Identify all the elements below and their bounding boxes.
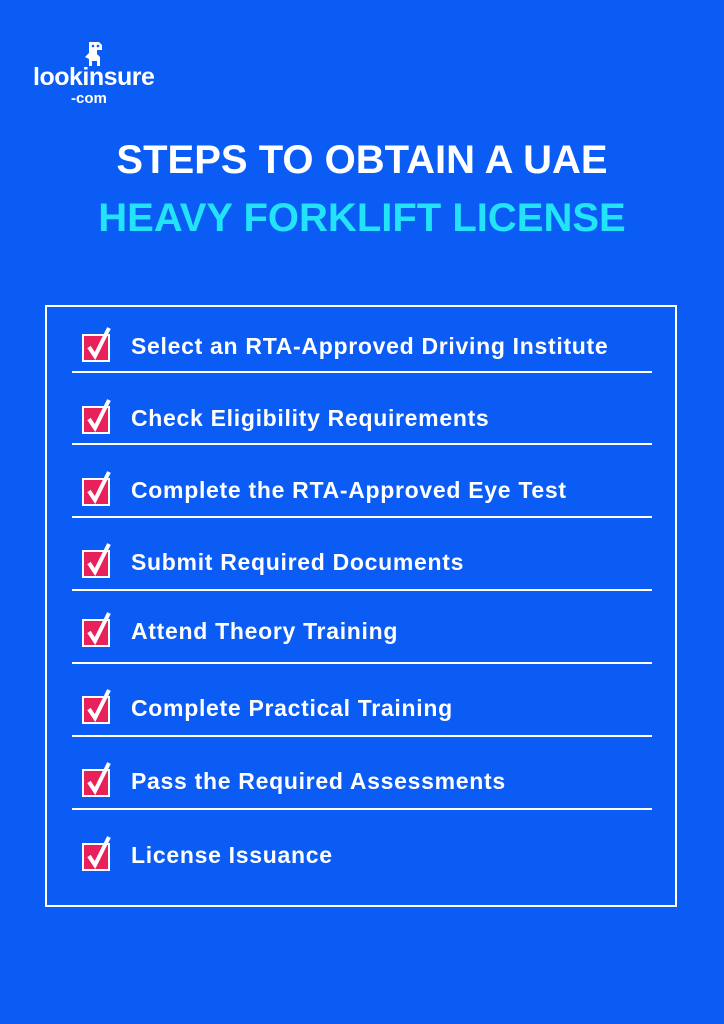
step 8 (82, 836, 333, 871)
title: STEPS TO OBTAIN A UAE (116, 138, 608, 182)
step 7: Pass the Required Assessments (131, 768, 506, 794)
step 5: Attend Theory Training (131, 618, 398, 644)
logo (33, 42, 154, 107)
step 4: Submit Required Documents (131, 549, 464, 575)
step 1: Select an RTA-Approved Driving Institute (131, 333, 608, 359)
step 7 (82, 762, 506, 797)
step 1 (82, 327, 608, 362)
logo: -com (71, 90, 107, 107)
step 8: License Issuance (131, 842, 333, 868)
logo text: lookinsure (33, 63, 154, 91)
step 6: Complete Practical Training (131, 695, 453, 721)
step 5 (82, 612, 398, 647)
icon: dino (85, 42, 102, 66)
step 2: Check Eligibility Requirements (131, 405, 489, 431)
step 2 (82, 399, 489, 434)
panel: steps (45, 305, 677, 907)
step 4 (82, 543, 464, 578)
step 3 (82, 471, 567, 506)
step 6 (82, 689, 453, 724)
subtitle: HEAVY FORKLIFT LICENSE (98, 196, 626, 240)
step 3: Complete the RTA-Approved Eye Test (131, 477, 567, 503)
